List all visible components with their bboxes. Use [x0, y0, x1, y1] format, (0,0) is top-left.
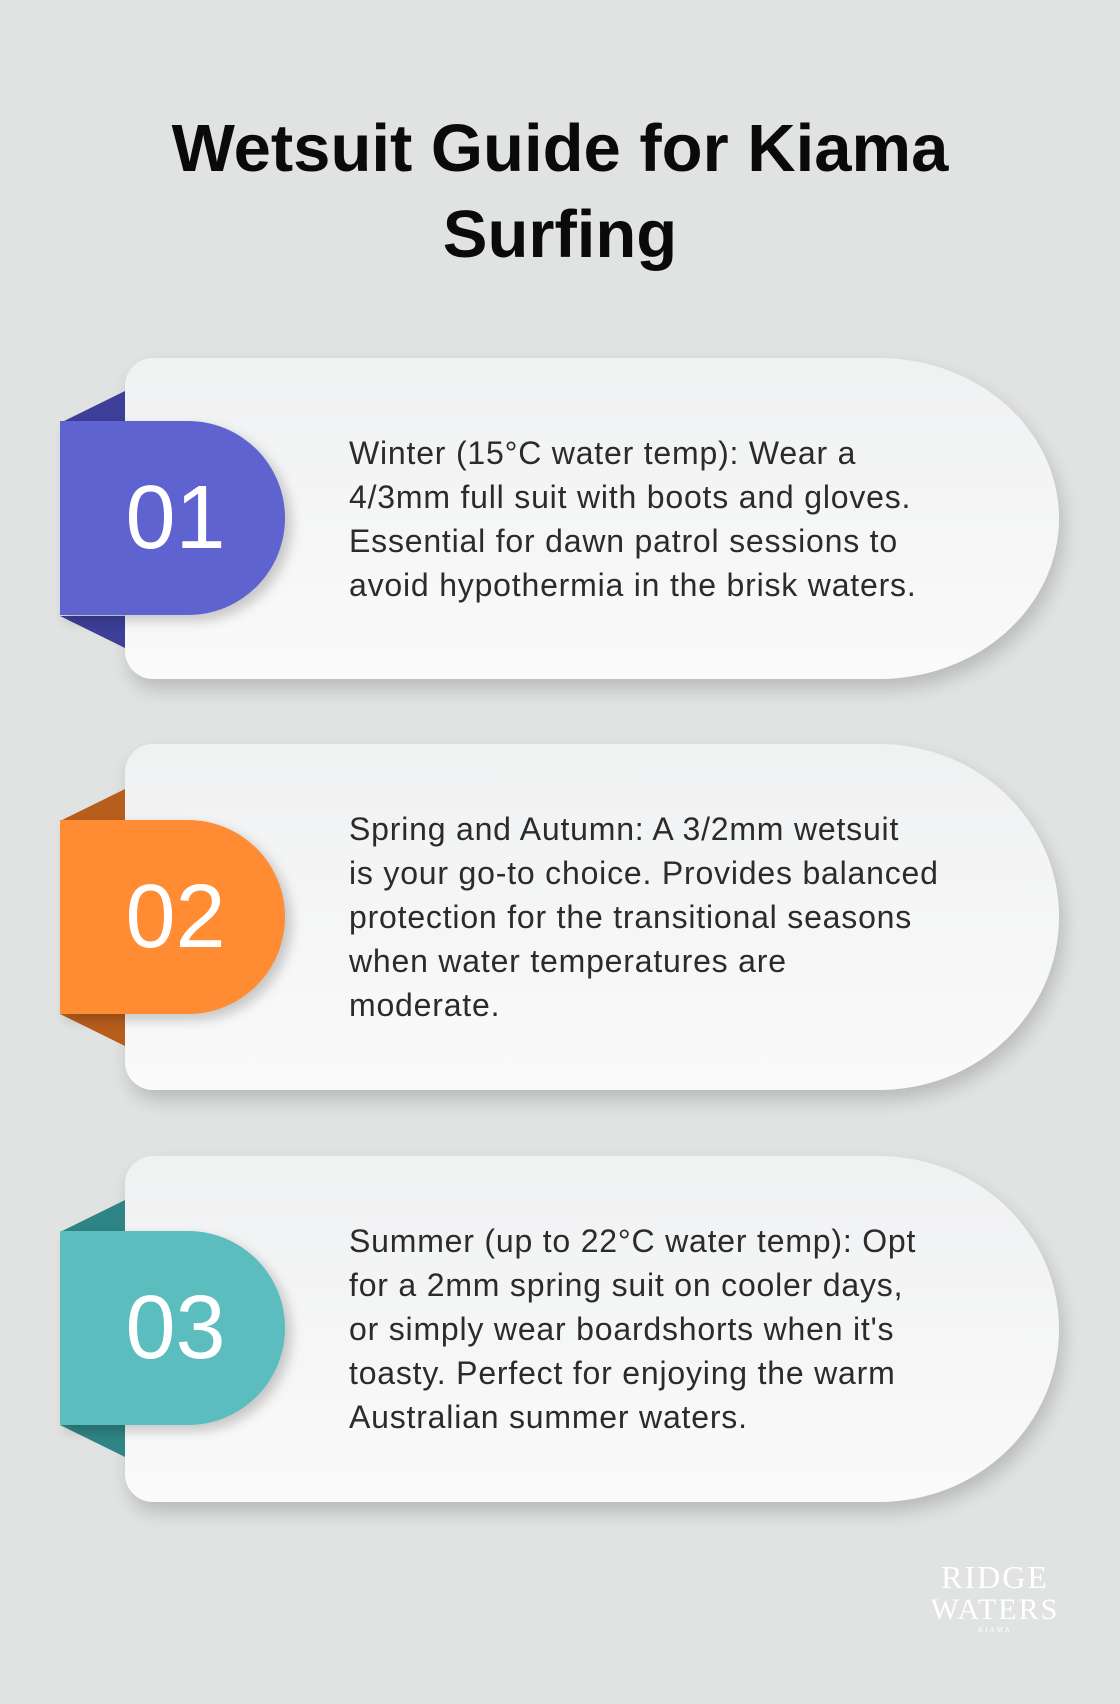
- badge 02: [60, 820, 285, 1014]
- fold top 1: [64, 391, 125, 421]
- title: [172, 111, 949, 272]
- panel: card 1 winter: [125, 358, 1059, 679]
- fold bottom 1: [60, 616, 125, 648]
- fold bottom 2: [60, 1014, 125, 1046]
- title: Wetsuit Guide for Kiama: [172, 111, 948, 186]
- badge 01: [60, 421, 285, 615]
- text: summer: Australian summer waters.: [349, 1399, 748, 1435]
- text: summer: or simply wear boardshorts when it's: [349, 1311, 894, 1347]
- logo: WATERS: [931, 1593, 1059, 1626]
- title: Surfing: [443, 197, 677, 272]
- text: summer: toasty. Perfect for enjoying the warm: [349, 1355, 896, 1391]
- panel: card 3 summer: [125, 1156, 1059, 1502]
- text: spring autumn: [349, 811, 939, 1023]
- text: winter: Winter (15°C water temp): Wear a: [349, 434, 856, 470]
- text: spring autumn: when water temperatures are: [349, 943, 787, 979]
- text: spring autumn: moderate.: [349, 987, 500, 1023]
- badge 02: 02: [125, 866, 226, 966]
- logo: [930, 1559, 1059, 1634]
- logo: RIDGE: [941, 1559, 1049, 1595]
- text: spring autumn: protection for the transitional seasons: [349, 899, 912, 935]
- text: winter: avoid hypothermia in the brisk waters.: [349, 566, 917, 602]
- panel: card 2 spring/autumn: [125, 744, 1059, 1090]
- badge 03: [60, 1231, 285, 1425]
- logo: KIAMA: [978, 1626, 1012, 1634]
- text: winter: Essential for dawn patrol sessions to: [349, 522, 898, 558]
- badge 01: 01: [125, 468, 226, 568]
- fold bottom 3: [60, 1425, 125, 1457]
- text: summer: [349, 1223, 916, 1435]
- text: spring autumn: is your go-to choice. Provides balanced: [349, 855, 939, 891]
- fold top 2: [62, 789, 125, 820]
- text: winter: [349, 434, 917, 602]
- badge 03: 03: [125, 1278, 226, 1378]
- text: summer: Summer (up to 22°C water temp): Opt: [349, 1223, 916, 1259]
- text: winter: 4/3mm full suit with boots and gloves.: [349, 478, 911, 514]
- text: spring autumn: Spring and Autumn: A 3/2mm wetsuit: [349, 811, 899, 847]
- fold top 3: [62, 1200, 125, 1231]
- text: summer: for a 2mm spring suit on cooler days,: [349, 1267, 903, 1303]
